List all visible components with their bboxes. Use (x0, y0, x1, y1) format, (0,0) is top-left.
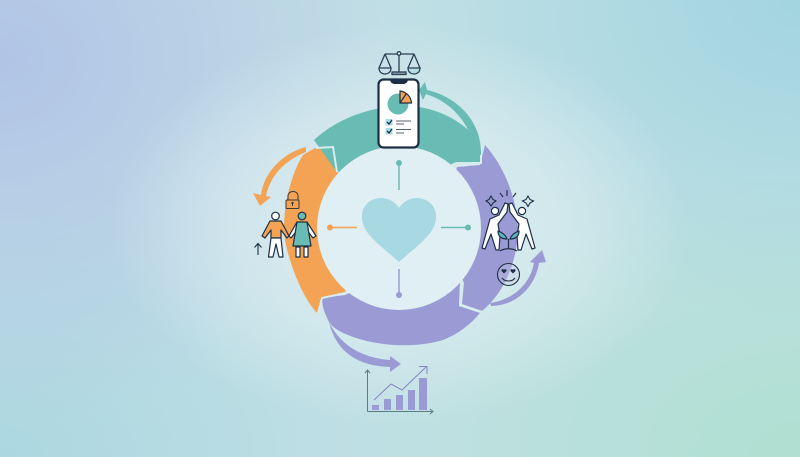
center disc (317, 146, 481, 310)
heart (362, 198, 436, 262)
icon: high five with sprout (482, 203, 535, 251)
checklist (386, 119, 411, 134)
connector: left (327, 224, 357, 230)
axes (365, 370, 433, 414)
arrow: purple bottom curved (329, 322, 401, 372)
arrow: orange curved (253, 147, 306, 206)
arrow: teal curved (419, 82, 481, 155)
icon: smiley with heart eyes (498, 264, 520, 286)
segment: purple bottom arrow (322, 270, 480, 345)
segment outlines (316, 145, 482, 313)
icon: padlock (286, 192, 299, 208)
arrow: purple right curved (490, 250, 546, 306)
icon: growth chart (365, 366, 433, 414)
icon: phone report (378, 79, 418, 148)
cycle ring (284, 106, 518, 345)
bars (372, 378, 427, 410)
connector: bottom (396, 269, 402, 298)
segment: orange left arrow (284, 147, 370, 313)
icon: couple holding hands (262, 211, 316, 257)
segment: purple right arrow (440, 145, 518, 311)
icon: up arrow (254, 244, 262, 255)
icon: sparkles (486, 190, 534, 206)
trend line (374, 366, 427, 400)
segment: teal top arrow (314, 106, 481, 190)
man (262, 212, 289, 257)
pie chart (388, 91, 412, 114)
sprout (498, 231, 519, 251)
connector: right (441, 224, 471, 230)
icon: balance scale (379, 52, 420, 74)
connector: top (396, 160, 402, 190)
woman (289, 211, 316, 257)
